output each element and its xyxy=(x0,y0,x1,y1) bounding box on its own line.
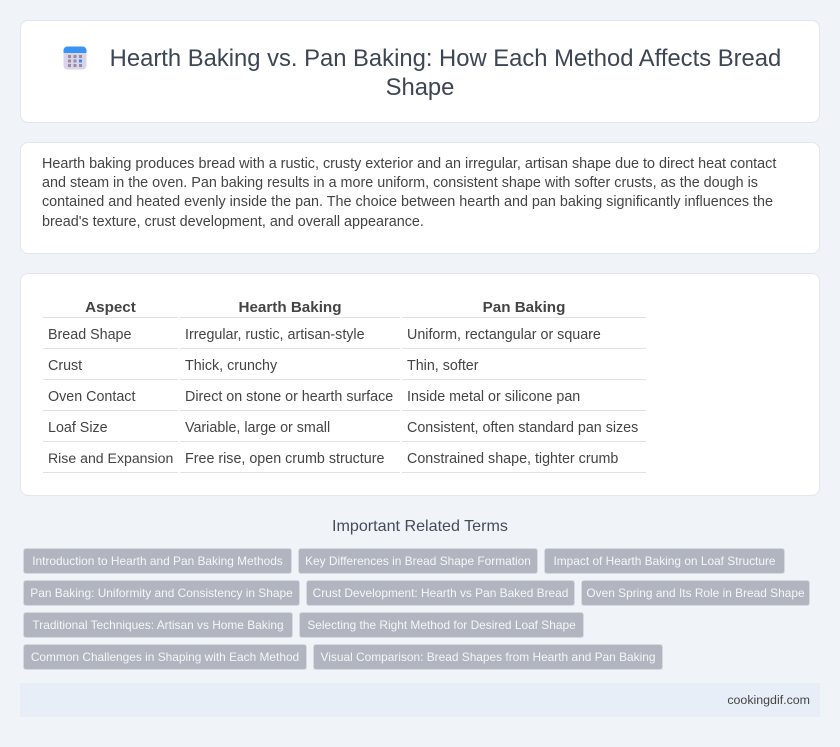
icon: calendar xyxy=(64,46,86,70)
footer bar xyxy=(20,683,820,717)
related terms tags: Common Challenges in Shaping with Each Method xyxy=(31,650,299,664)
panel: comparison table xyxy=(20,273,820,496)
related terms tags: Crust Development: Hearth vs Pan Baked Bread xyxy=(313,586,568,600)
panel: introduction text xyxy=(20,142,820,254)
comparison table: Pan Baking xyxy=(483,299,565,316)
panel: introduction text: and steam in the oven. Pan baking results in a more uniform, consistent shape with softer crusts, as the dough is xyxy=(42,175,758,191)
header panel xyxy=(20,20,820,123)
related terms tags: Visual Comparison: Bread Shapes from Hearth and Pan Baking xyxy=(321,650,655,664)
comparison table: Uniform, rectangular or square xyxy=(407,327,601,343)
comparison table: Irregular, rustic, artisan-style xyxy=(185,327,365,343)
panel: introduction text: Hearth baking produces bread with a rustic, crusty exterior and an irregular, artisan shape due to direct heat contact xyxy=(42,156,776,172)
related terms tags: Pan Baking: Uniformity and Consistency in Shape xyxy=(30,586,293,600)
comparison table: Variable, large or small xyxy=(185,420,330,436)
comparison table: Thin, softer xyxy=(407,358,479,374)
comparison table: Bread Shape xyxy=(48,327,131,343)
comparison table: Hearth Baking xyxy=(239,299,341,316)
title xyxy=(110,45,781,101)
comparison table: Crust xyxy=(48,358,82,374)
comparison table xyxy=(43,299,646,473)
related terms tags: Key Differences in Bread Shape Formation xyxy=(305,554,531,568)
panel: introduction text: contained and heated evenly inside the pan. The choice between hearth and pan baking significantly influences the xyxy=(42,194,773,210)
comparison table: Direct on stone or hearth surface xyxy=(185,389,393,405)
comparison table: Consistent, often standard pan sizes xyxy=(407,420,638,436)
related terms tags: Traditional Techniques: Artisan vs Home Baking xyxy=(32,618,284,632)
heading: important related terms: Important Related Terms xyxy=(332,517,508,535)
comparison table: Constrained shape, tighter crumb xyxy=(407,451,618,467)
comparison table: Loaf Size xyxy=(48,420,108,436)
comparison table: Oven Contact xyxy=(48,389,135,405)
comparison table: Thick, crunchy xyxy=(185,358,277,374)
related terms tags: Impact of Hearth Baking on Loaf Structure xyxy=(553,554,776,568)
title: Shape xyxy=(386,74,454,101)
comparison table: Inside metal or silicone pan xyxy=(407,389,580,405)
related terms tags xyxy=(23,548,810,670)
related terms tags: Selecting the Right Method for Desired Loaf Shape xyxy=(307,618,576,632)
related terms tags: Introduction to Hearth and Pan Baking Methods xyxy=(32,554,283,568)
comparison table: Rise and Expansion xyxy=(48,450,173,466)
comparison table: Free rise, open crumb structure xyxy=(185,451,384,467)
title: Hearth Baking vs. Pan Baking: How Each Method Affects Bread xyxy=(110,45,781,72)
footer credit: cookingdif.com xyxy=(727,693,810,707)
comparison table: Aspect xyxy=(85,299,136,316)
related terms tags: Oven Spring and Its Role in Bread Shape xyxy=(586,586,805,600)
panel: introduction text: bread's texture, crust development, and overall appearance. xyxy=(42,214,424,230)
